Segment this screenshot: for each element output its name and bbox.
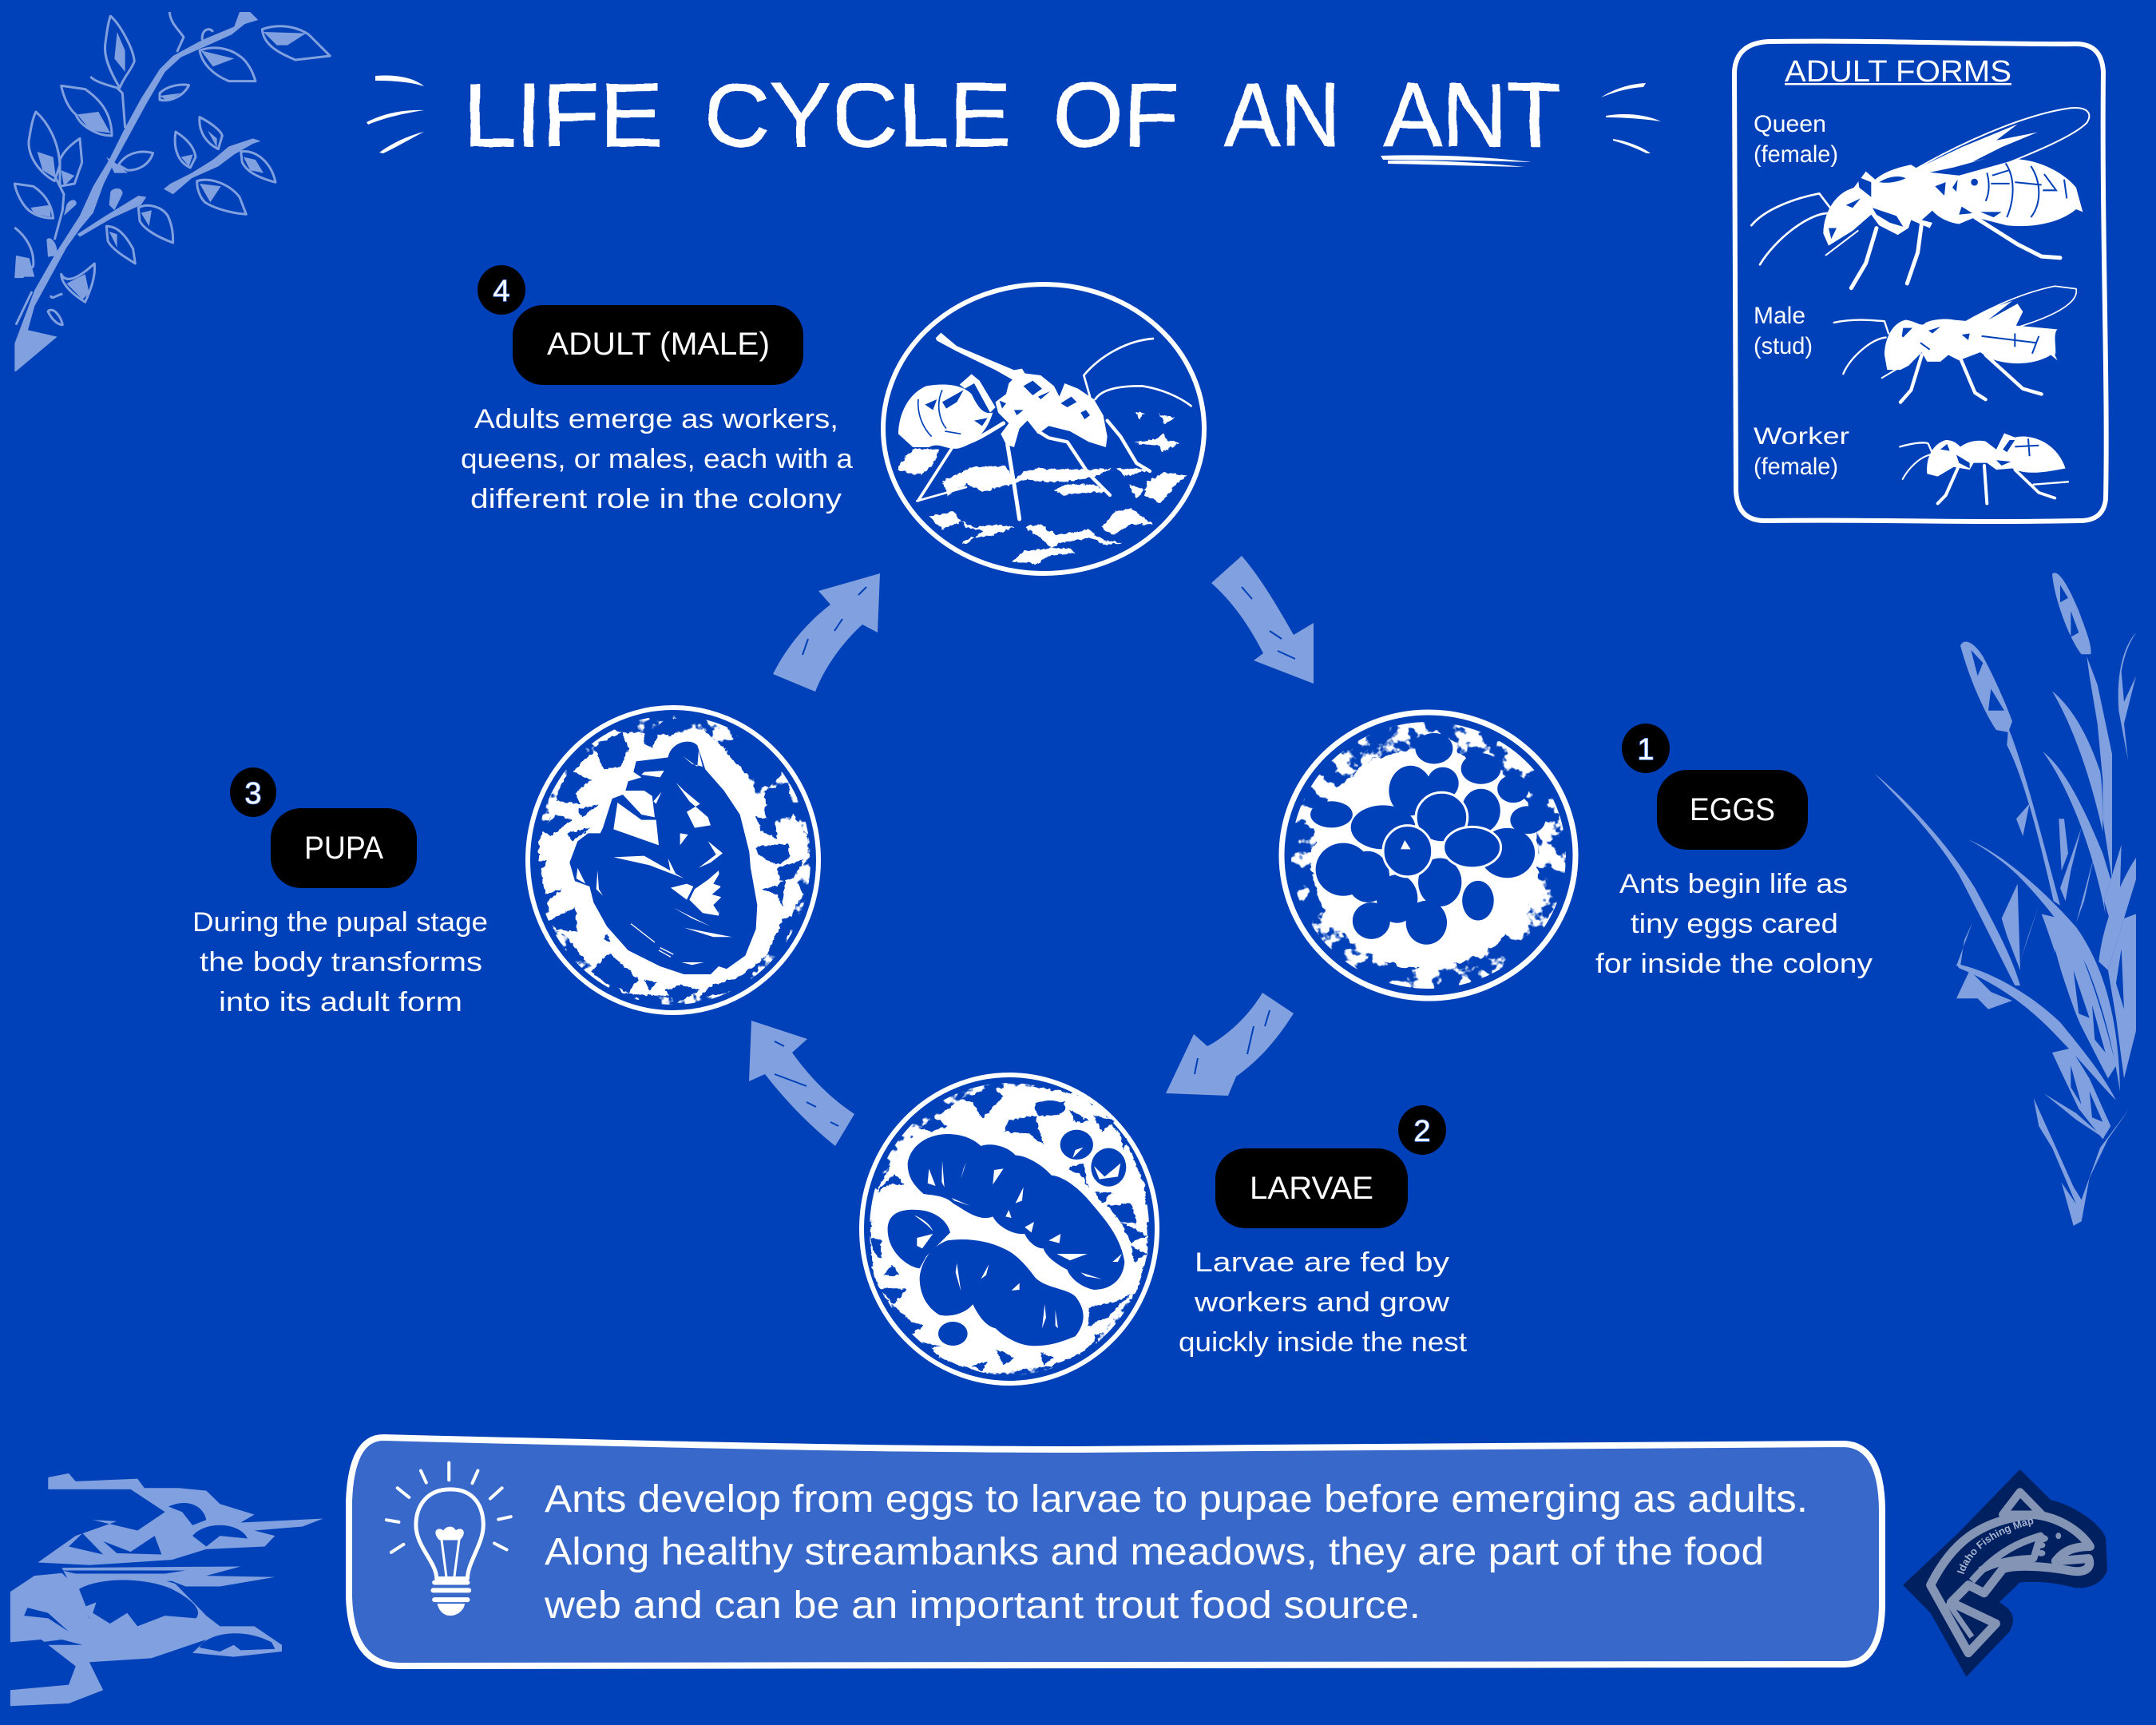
arrow: adult to eggs — [1211, 556, 1314, 684]
icon: male ant — [1834, 286, 2076, 402]
step number 2: 2 — [1413, 1115, 1431, 1148]
description: pupa: the body transforms — [200, 947, 482, 978]
stage 3: pupa circle — [528, 708, 818, 1013]
stage label: adult — [513, 305, 803, 385]
left title accent strokes — [367, 76, 424, 153]
decoration: leafy branch top left — [14, 12, 330, 371]
description: pupa: During the pupal stage — [192, 907, 488, 938]
arrow: larvae to pupa — [749, 1021, 854, 1146]
description: adult: different role in the colony — [470, 484, 842, 514]
step number 3: 3 — [244, 777, 262, 811]
callout text: Ants develop from eggs to larvae to pupae before emerging as adults. — [545, 1478, 1808, 1521]
callout text: web and can be an important trout food source. — [544, 1584, 1421, 1627]
stage 2: larvae circle — [862, 1075, 1157, 1383]
icon: egg cluster — [1310, 733, 1545, 945]
step number 1: 1 — [1637, 733, 1655, 767]
icon: pupa — [569, 742, 757, 974]
step number 4 — [478, 265, 525, 315]
title: OF — [1052, 65, 1179, 165]
panel: adult forms — [1734, 42, 2106, 521]
decoration: rocks bottom left — [10, 1473, 323, 1706]
step number 3 — [230, 767, 276, 817]
pupa nest background — [537, 719, 809, 1004]
description: eggs: for inside the colony — [1595, 949, 1873, 979]
icon: queen ant — [1751, 108, 2089, 288]
icon: adult ant — [898, 333, 1191, 519]
label: worker: Worker — [1754, 423, 1849, 450]
label: queen: Queen — [1754, 111, 1826, 137]
step number 4: 4 — [493, 275, 510, 308]
decoration: reeds right — [1874, 573, 2136, 1226]
label: male: (stud) — [1754, 333, 1813, 359]
description: larvae: Larvae are fed by — [1195, 1247, 1449, 1278]
icon: larvae — [888, 1100, 1126, 1346]
title: AN — [1224, 65, 1341, 165]
stage label: larvae — [1215, 1148, 1408, 1228]
arrow: eggs to larvae — [1166, 993, 1294, 1096]
title: CYCLE — [703, 65, 1011, 165]
logo: Idaho Fishing Map fish — [1903, 1469, 2107, 1677]
description: adult: Adults emerge as workers, — [474, 404, 838, 434]
step number 2 — [1398, 1105, 1446, 1155]
stage label: eggs: EGGS — [1690, 792, 1775, 827]
larvae nest background — [870, 1086, 1147, 1374]
callout text: Along healthy streambanks and meadows, they are part of the food — [545, 1531, 1764, 1573]
title: LIFE — [463, 65, 663, 165]
panel: key takeaway callout — [349, 1438, 1882, 1666]
stage label: pupa — [271, 808, 417, 888]
description: eggs: Ants begin life as — [1619, 869, 1848, 899]
title — [463, 65, 1562, 165]
stage 4: adult circle — [883, 284, 1204, 573]
logo: Idaho Fishing Map fish: Idaho Fishing Map — [1956, 1519, 2033, 1575]
description: larvae: workers and grow — [1194, 1287, 1450, 1318]
icon: light bulb — [386, 1463, 511, 1616]
stage 1: eggs circle — [1282, 712, 1575, 998]
stage label: pupa: PUPA — [304, 831, 383, 866]
stage label: larvae: LARVAE — [1250, 1171, 1373, 1206]
adult forms heading: ADULT FORMS — [1785, 55, 2011, 89]
title underline — [1381, 155, 1532, 167]
adult ground — [898, 413, 1187, 565]
description: pupa: into its adult form — [219, 987, 462, 1017]
description: larvae: quickly inside the nest — [1179, 1327, 1468, 1358]
label: male: Male — [1754, 303, 1805, 329]
stage label: adult: ADULT (MALE) — [547, 327, 770, 362]
title: ANT — [1383, 65, 1562, 165]
label: worker: (female) — [1754, 454, 1838, 480]
step number 1 — [1622, 724, 1670, 773]
description: adult: queens, or males, each with a — [461, 444, 853, 474]
stage label: eggs — [1657, 770, 1808, 850]
description: eggs: tiny eggs cared — [1631, 909, 1838, 939]
right title accent strokes — [1601, 83, 1661, 153]
label: queen: (female) — [1754, 141, 1838, 168]
arrow: pupa to adult — [773, 573, 880, 692]
icon: worker ant — [1900, 433, 2068, 503]
